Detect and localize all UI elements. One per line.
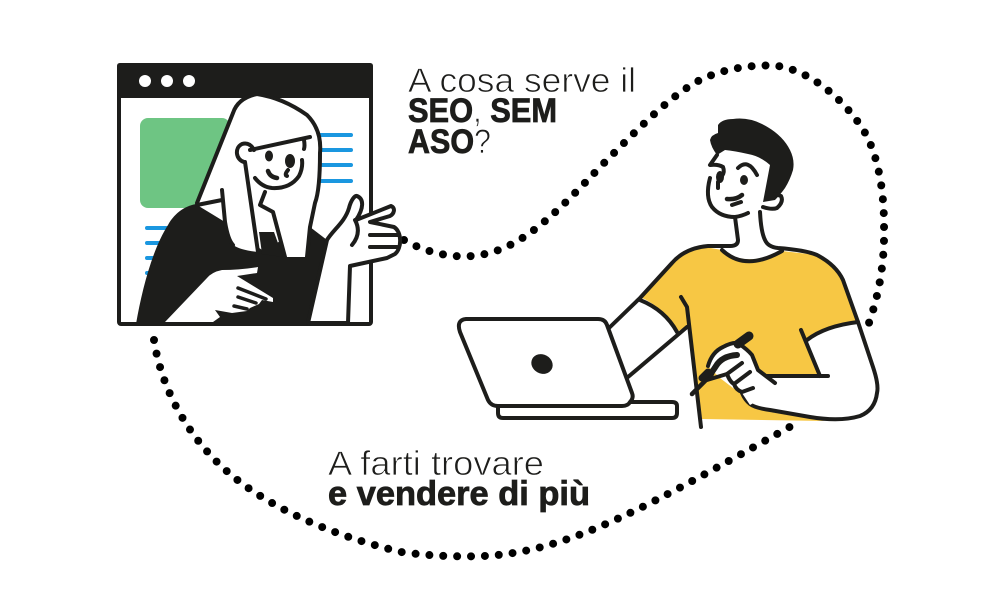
man's hair <box>710 119 794 202</box>
panel: browser window with woman <box>117 63 400 324</box>
laptop logo <box>528 350 556 378</box>
blue text lines right <box>318 135 351 181</box>
neckline <box>197 200 225 222</box>
blue text lines left <box>147 228 175 273</box>
heading: answer: A farti trovare <box>328 445 544 483</box>
woman right hand <box>308 196 400 323</box>
man's right arm <box>742 322 878 419</box>
white arm and torso base <box>609 298 690 377</box>
window control dots <box>139 75 195 87</box>
heading: question <box>408 62 636 161</box>
woman face <box>237 137 310 188</box>
heading: answer <box>328 445 590 513</box>
man's head <box>708 119 794 217</box>
laptop screen <box>459 319 633 406</box>
laptop base <box>498 402 677 418</box>
woman hair <box>197 94 320 257</box>
laptop <box>459 319 677 418</box>
woman body <box>136 204 327 324</box>
man outline strokes <box>609 212 878 427</box>
window title bar <box>117 63 373 98</box>
heading: question: SEO, SEM <box>408 92 557 130</box>
heading: question: ASO? <box>408 123 491 161</box>
hand holding pen <box>692 336 775 405</box>
woman left hand <box>165 267 273 322</box>
panel: man with laptop <box>459 119 878 427</box>
heading: question: A cosa serve il <box>408 62 636 100</box>
heading: answer: e vendere di più <box>328 475 590 513</box>
yellow t-shirt <box>640 247 858 421</box>
pen <box>692 374 712 394</box>
woman eyes <box>265 150 295 168</box>
neck dark patch <box>259 232 283 257</box>
dotted connector line <box>154 66 884 556</box>
green image placeholder <box>140 118 230 208</box>
